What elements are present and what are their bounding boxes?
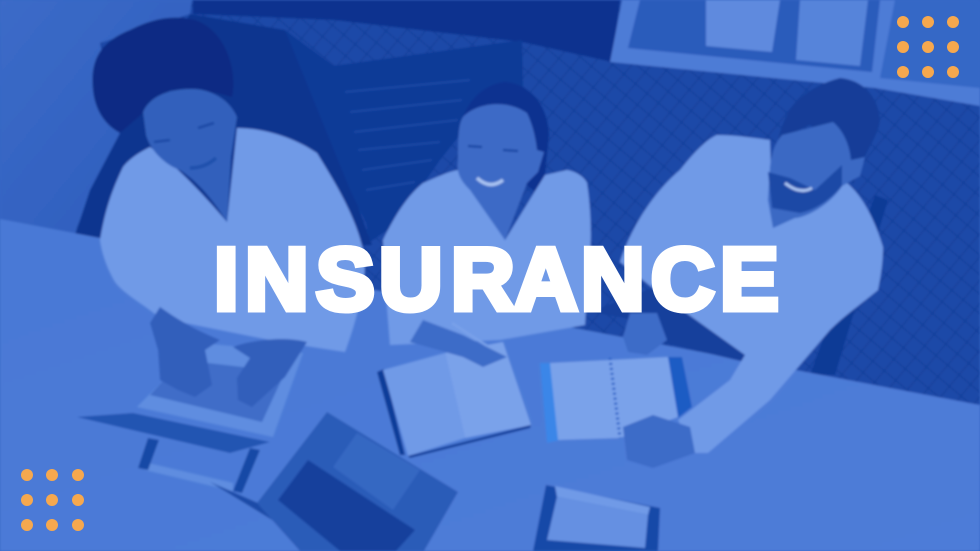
- hair: [460, 82, 563, 196]
- man's jeans: [590, 285, 800, 362]
- tablet bottom: [533, 485, 660, 551]
- table surface: [0, 219, 980, 551]
- shirt: [620, 135, 883, 453]
- title: S: [316, 230, 375, 328]
- dots: bottom left: [21, 469, 84, 531]
- pen: [452, 323, 498, 353]
- title: A: [514, 230, 578, 328]
- open notebook centre: [377, 320, 531, 458]
- hand holding pen: [623, 313, 667, 355]
- small notepad left: [138, 438, 260, 493]
- hair: [92, 18, 233, 133]
- title: C: [651, 230, 715, 328]
- open notebook right: [540, 357, 695, 468]
- shirt: [383, 170, 591, 345]
- office chairs: [75, 14, 888, 375]
- shelf at top right: [610, 0, 980, 106]
- title: U: [379, 230, 443, 328]
- laptop bottom: [210, 412, 458, 551]
- face: [458, 104, 544, 240]
- person middle: [383, 82, 591, 353]
- face: [768, 122, 865, 228]
- person right: [620, 78, 883, 453]
- title: R: [451, 230, 515, 328]
- face: [143, 89, 237, 222]
- person left: [92, 18, 365, 352]
- shirt: [100, 128, 365, 352]
- dots: top right: [897, 16, 959, 78]
- beard: [768, 165, 842, 213]
- title: N: [245, 230, 309, 328]
- title: I: [214, 230, 238, 328]
- open laptop under hands: [77, 307, 307, 453]
- title: E: [720, 230, 779, 328]
- title: N: [581, 230, 645, 328]
- hair: [778, 78, 880, 185]
